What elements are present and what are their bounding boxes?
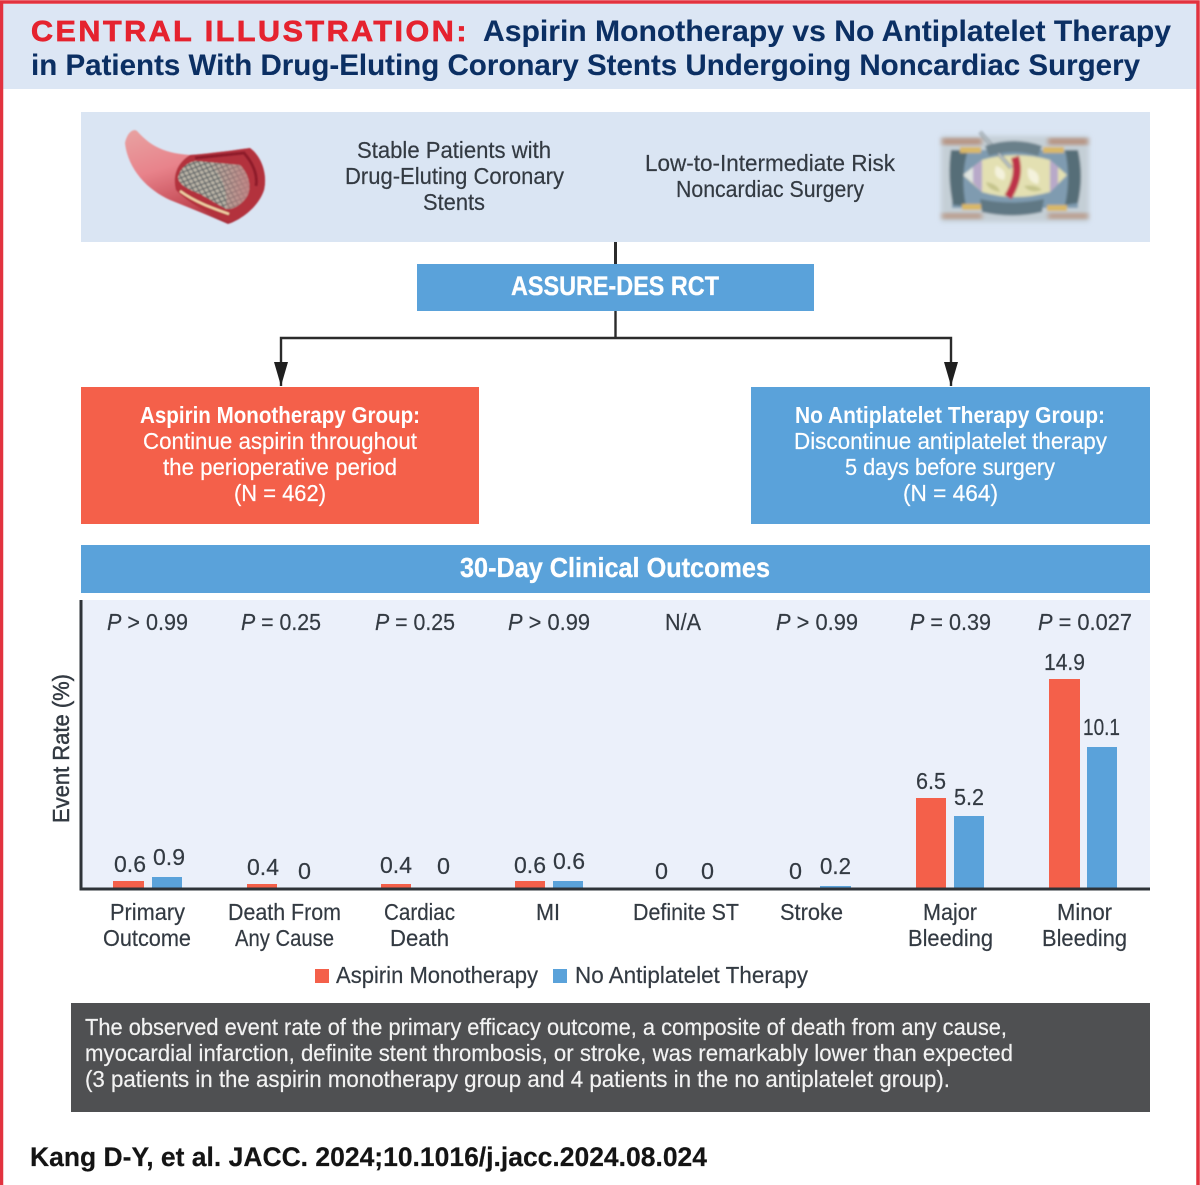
category labels bbox=[103, 899, 1127, 951]
title: second line: in Patients With Drug-Eluting Coronary Stents Undergoing Noncardiac Surgery bbox=[31, 49, 1140, 82]
category labels: Any Cause bbox=[235, 925, 334, 951]
panel: aspirin monotherapy group: (N = 462) bbox=[234, 480, 326, 506]
category labels: Cardiac bbox=[384, 899, 455, 925]
panel: no antiplatelet therapy group: 5 days before surgery bbox=[845, 454, 1055, 480]
value labels bbox=[114, 649, 1120, 884]
p values: P > 0.99 bbox=[107, 609, 188, 635]
text: patients bbox=[345, 137, 564, 215]
panel: aspirin monotherapy group: Aspirin Monotherapy Group: bbox=[140, 402, 420, 428]
p values: P = 0.25 bbox=[241, 609, 321, 635]
text: patients: Stable Patients with bbox=[357, 137, 551, 163]
p values bbox=[107, 609, 1132, 635]
panel: aspirin monotherapy group: the perioperative period bbox=[163, 454, 397, 480]
value labels: 5.2 bbox=[954, 784, 984, 810]
category labels: Death From bbox=[228, 899, 341, 925]
value labels: 0.6 bbox=[553, 848, 585, 874]
value labels: 0 bbox=[701, 858, 714, 884]
legend bbox=[315, 962, 808, 988]
value labels: 0 bbox=[655, 858, 668, 884]
y axis label: Event Rate (%) bbox=[48, 674, 74, 823]
p values: P = 0.39 bbox=[910, 609, 991, 635]
category labels: Primary bbox=[110, 899, 185, 925]
panel: no antiplatelet therapy group: (N = 464) bbox=[903, 480, 998, 506]
category labels: Major bbox=[923, 899, 977, 925]
citation: Kang D-Y, et al. JACC. 2024;10.1016/j.jacc.2024.08.024 bbox=[30, 1142, 707, 1172]
text: patients: Stents bbox=[423, 189, 485, 215]
p values: P = 0.25 bbox=[375, 609, 455, 635]
p values: P > 0.99 bbox=[776, 609, 858, 635]
chart axes bbox=[81, 600, 1150, 889]
title band bbox=[3, 4, 1197, 89]
category labels: Bleeding bbox=[908, 925, 993, 951]
panel: no antiplatelet therapy group: No Antiplatelet Therapy Group: bbox=[795, 402, 1105, 428]
legend: Aspirin Monotherapy bbox=[336, 962, 538, 988]
bars: aspirin monotherapy bbox=[113, 679, 1080, 889]
callout: summary: myocardial infarction, definite stent thrombosis, or stroke, was remarkably lower than expected bbox=[85, 1040, 1013, 1066]
value labels: 6.5 bbox=[916, 768, 946, 794]
value labels: 0.4 bbox=[247, 854, 279, 880]
p values: N/A bbox=[665, 609, 701, 635]
callout: summary: (3 patients in the aspirin monotherapy group and 4 patients in the no antiplatelet group). bbox=[85, 1066, 950, 1092]
value labels: 0 bbox=[298, 858, 311, 884]
category labels: MI bbox=[536, 899, 560, 925]
panel: study population bbox=[81, 112, 1150, 242]
text: surgery: Noncardiac Surgery bbox=[676, 176, 864, 202]
value labels: 0.2 bbox=[820, 853, 851, 879]
value labels: 10.1 bbox=[1083, 714, 1120, 740]
box: trial name: ASSURE-DES RCT bbox=[511, 271, 719, 301]
category labels: Bleeding bbox=[1042, 925, 1127, 951]
icon: coronary artery with stent bbox=[125, 130, 265, 224]
icon: surgical field bbox=[941, 132, 1089, 222]
category labels: Definite ST bbox=[633, 899, 739, 925]
arrow: population to trial bbox=[614, 242, 617, 264]
panel: aspirin monotherapy group bbox=[81, 387, 479, 524]
text: patients: Drug-Eluting Coronary bbox=[345, 163, 564, 189]
panel: no antiplatelet therapy group: Discontinue antiplatelet therapy bbox=[794, 428, 1107, 454]
value labels: 0.6 bbox=[514, 852, 546, 878]
category labels: Death bbox=[390, 925, 449, 951]
title: first line: Aspirin Monotherapy vs No Antiplatelet Therapy bbox=[483, 15, 1171, 48]
heading: 30-day clinical outcomes: 30-Day Clinical Outcomes bbox=[460, 552, 770, 583]
heading: 30-day clinical outcomes bbox=[81, 545, 1150, 593]
value labels: 0.4 bbox=[380, 852, 412, 878]
category labels: Outcome bbox=[103, 925, 191, 951]
value labels: 0.9 bbox=[153, 844, 185, 870]
legend: No Antiplatelet Therapy bbox=[575, 962, 808, 988]
value labels: 0.6 bbox=[114, 851, 146, 877]
box: trial name bbox=[417, 264, 814, 311]
title: red label: CENTRAL ILLUSTRATION: bbox=[31, 16, 469, 48]
arrows: randomization to two groups bbox=[274, 311, 958, 386]
bars: no antiplatelet therapy bbox=[152, 747, 1117, 889]
text: surgery: Low-to-Intermediate Risk bbox=[645, 150, 895, 176]
callout: summary: The observed event rate of the primary efficacy outcome, a composite of death from any cause, bbox=[85, 1014, 1007, 1040]
callout: summary bbox=[71, 1003, 1150, 1112]
panel: aspirin monotherapy group: Continue aspirin throughout bbox=[143, 428, 417, 454]
value labels: 14.9 bbox=[1044, 649, 1085, 675]
panel: no antiplatelet therapy group bbox=[751, 387, 1150, 524]
p values: P = 0.027 bbox=[1038, 609, 1132, 635]
value labels: 0 bbox=[437, 853, 450, 879]
category labels: Minor bbox=[1057, 899, 1112, 925]
category labels: Stroke bbox=[780, 899, 843, 925]
value labels: 0 bbox=[789, 858, 802, 884]
p values: P > 0.99 bbox=[508, 609, 590, 635]
bar chart: event rates bbox=[48, 600, 1150, 951]
text: surgery bbox=[645, 150, 895, 202]
